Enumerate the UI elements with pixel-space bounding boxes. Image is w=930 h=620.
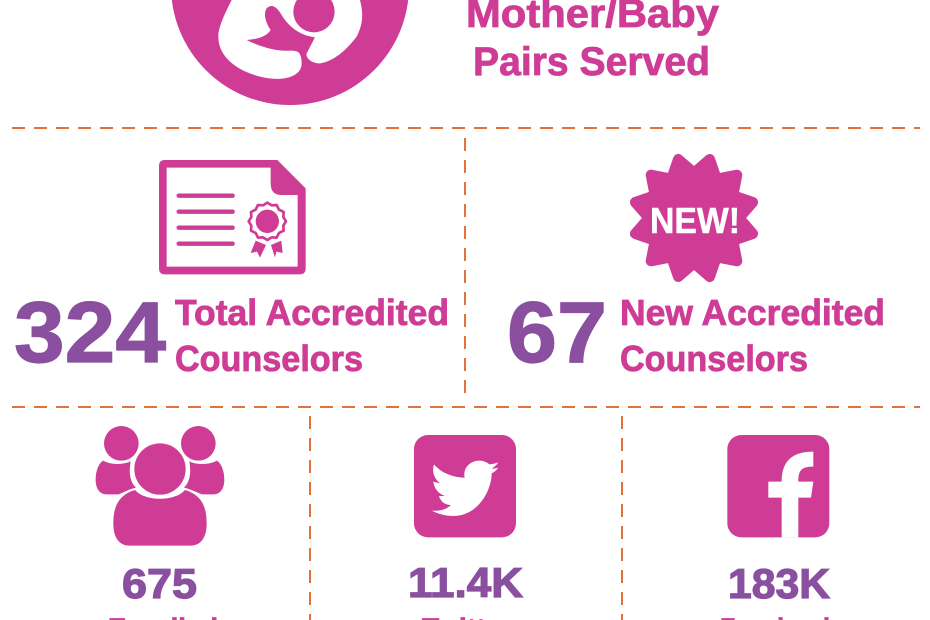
- icon: certificate: [159, 160, 306, 274]
- stat: 675 enrolled: [108, 560, 218, 620]
- stat: 67 new accredited counselors: 67: [507, 285, 607, 381]
- stat: 324 total accredited counselors: [14, 285, 449, 381]
- stat: 324 total accredited counselors: Counselors: [175, 338, 363, 379]
- icon: mother and baby logo: [171, 0, 409, 105]
- stat: 324 total accredited counselors: Total Accredited: [175, 292, 449, 333]
- icon: twitter: [414, 435, 516, 537]
- icon: group of people: [96, 426, 224, 546]
- stat: 11.4K twitter: 11.4K: [408, 559, 523, 606]
- stat: 67 new accredited counselors: Counselors: [620, 338, 808, 379]
- stat: 675 enrolled: 675: [122, 560, 197, 607]
- heading: mother/baby pairs served: Pairs Served: [473, 40, 710, 84]
- icon: facebook: [727, 435, 829, 537]
- heading: mother/baby pairs served: [466, 0, 720, 84]
- stat: 67 new accredited counselors: New Accredited: [620, 292, 885, 333]
- stat: 183K facebook: 183K: [728, 560, 830, 607]
- icon: new badge: [635, 159, 753, 277]
- stat: 183K facebook: [720, 560, 837, 620]
- icon: new badge: NEW!: [650, 200, 740, 241]
- stat: 67 new accredited counselors: [507, 285, 885, 381]
- stat: 324 total accredited counselors: 324: [14, 285, 166, 381]
